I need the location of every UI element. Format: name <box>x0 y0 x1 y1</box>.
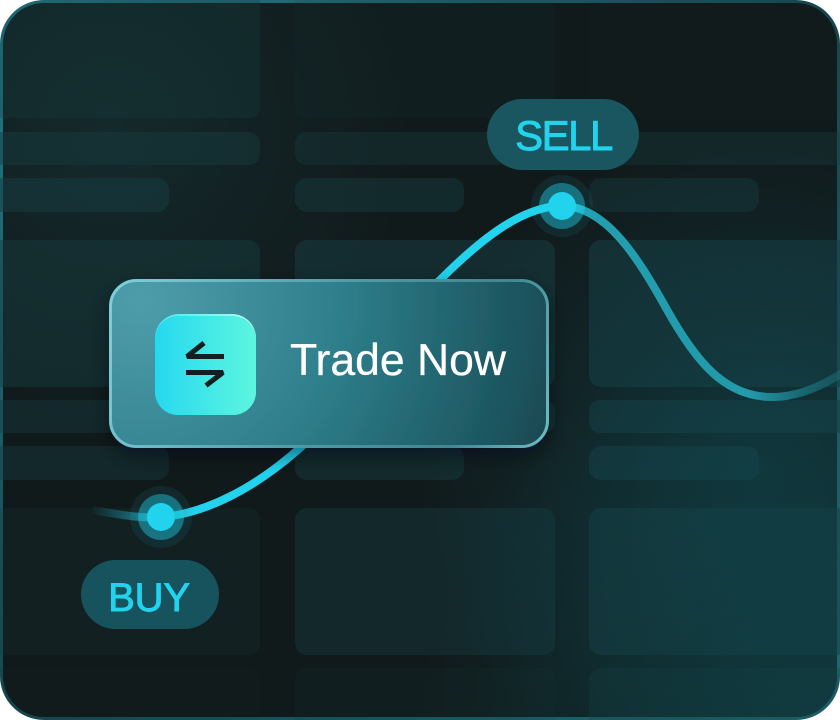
marker: buy point <box>130 486 192 548</box>
icon: swap arrows <box>155 314 256 415</box>
panel: trade now glass button <box>110 280 548 446</box>
label: sell <box>487 99 639 170</box>
label: sell: SELL <box>515 112 612 159</box>
label: buy: BUY <box>108 576 190 620</box>
label: buy <box>81 560 219 629</box>
chart line: price curve <box>92 206 840 517</box>
button label: Trade Now <box>290 336 507 385</box>
marker: sell point <box>531 175 593 237</box>
